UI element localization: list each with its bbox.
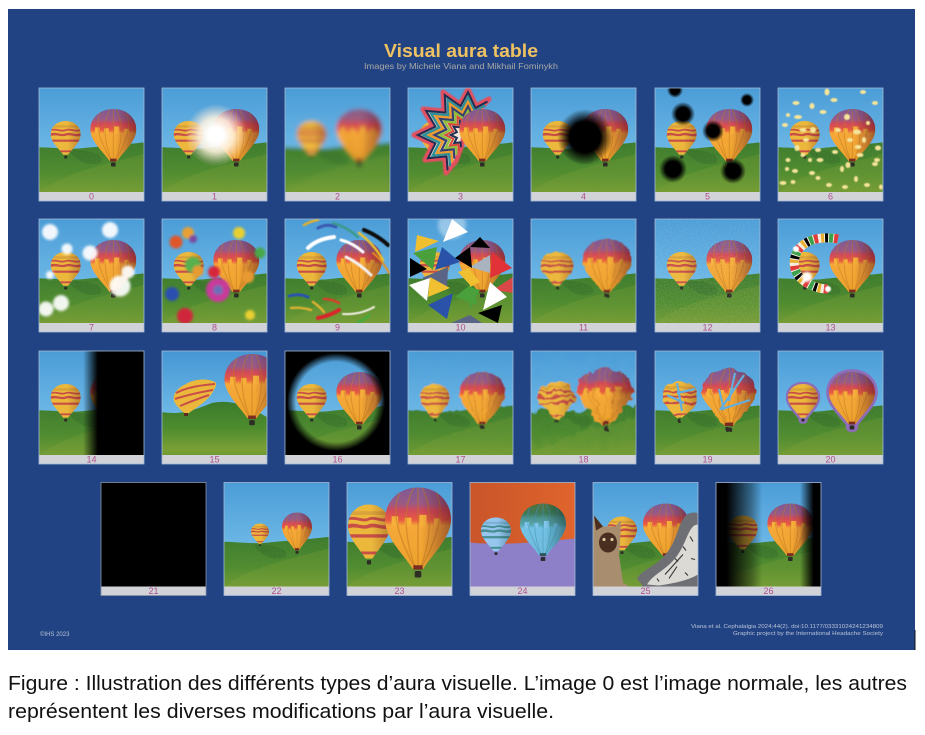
scene 6 with sparkles (778, 88, 883, 192)
number 9: 9 (335, 323, 340, 333)
number 16: 16 (332, 455, 343, 465)
number 13: 13 (825, 323, 836, 333)
black edge mark (914, 630, 916, 650)
number 5: 5 (705, 192, 710, 202)
scene 1 with white glare (162, 88, 267, 192)
panel 2: blurred vision (273, 76, 402, 204)
number 3: 3 (458, 192, 463, 202)
scene 25 balloons behind objects (593, 482, 698, 586)
number 4: 4 (581, 192, 586, 202)
scene 22 small balloons (224, 482, 329, 586)
panel 9: coloured streaks (273, 207, 402, 335)
number 15: 15 (209, 455, 220, 465)
number 0: 0 (89, 192, 94, 202)
panel 1: scintillating bright spot (150, 76, 279, 204)
scene 12 with noise (655, 219, 760, 323)
panel 17: wavy distortion (396, 339, 525, 467)
panel 11: shimmering image (519, 207, 648, 335)
scene 11 softened (531, 219, 636, 323)
melting clock (637, 512, 698, 586)
panel 16: tunnel vision (273, 339, 402, 467)
number 19: 19 (702, 455, 713, 465)
black image (101, 482, 206, 586)
scene 18 mosaic (531, 351, 636, 455)
scene 15 distorted (162, 351, 267, 455)
panel 5: multiple black spots (643, 76, 772, 204)
number 6: 6 (828, 192, 833, 202)
panel 7: white blotches (27, 207, 156, 335)
scene 0 (39, 88, 144, 192)
number 26: 26 (763, 586, 774, 596)
scene 13 with ring (778, 219, 883, 323)
panel 14: right hemianopia (27, 339, 156, 467)
number 2: 2 (335, 192, 340, 202)
scene 14 with black right side (39, 351, 144, 455)
number 10: 10 (455, 323, 466, 333)
number 8: 8 (212, 323, 217, 333)
panel 24: altered colours (470, 482, 575, 596)
panel 22: micropsia (212, 470, 341, 598)
scene 2 blurred (285, 88, 390, 192)
panel 3: zigzag fortification spectrum (396, 76, 525, 204)
copyright: ©IHS 2023 (40, 631, 70, 638)
number 12: 12 (702, 323, 713, 333)
number 1: 1 (212, 192, 217, 202)
scene 20 with halos (778, 351, 883, 455)
number 7: 7 (89, 323, 94, 333)
panel 19: fragmented balloons (643, 339, 772, 467)
scene 16 with black vignette (285, 351, 390, 455)
cat (593, 516, 629, 586)
scene 17 wavy (408, 351, 513, 455)
title: Visual aura table (384, 40, 538, 61)
caption line 1: Figure : Illustration des différents types d’aura visuelle. L’image 0 est l’image normale, les autres (8, 672, 907, 695)
scene 26 with dark sides (716, 482, 821, 586)
subtitle: Images by Michele Viana and Mikhail Fominykh (364, 61, 558, 71)
number 25: 25 (640, 586, 651, 596)
number 23: 23 (394, 586, 405, 596)
scene 7 with white spots (39, 219, 144, 323)
panel 23: macropsia (335, 470, 464, 598)
number 24: 24 (517, 586, 528, 596)
scene 4 with black spot (531, 88, 636, 192)
panel 26: bilateral peripheral loss (704, 470, 833, 598)
panel 21: total blindness, black image (101, 482, 206, 596)
panel 4: central black scotoma (519, 76, 648, 204)
panel 0: normal image (27, 76, 156, 204)
panel 25: hallucinated cat and melting clock (581, 470, 710, 598)
scene 19 fragmented (655, 351, 760, 455)
panel 15: distorted balloons and tilted horizon (162, 351, 280, 465)
number 20: 20 (825, 455, 836, 465)
scene 24 false colour (470, 482, 575, 586)
graphic credit: Graphic project by the International Headache Society (733, 631, 883, 637)
number 17: 17 (455, 455, 466, 465)
scene 5 with spots (655, 88, 760, 192)
panel 8: coloured blobs (150, 207, 279, 335)
scene 9 with streaks (285, 219, 390, 323)
scene 3 with zigzag arc (408, 88, 513, 192)
panel 13: coloured ring around small balloon (766, 207, 895, 335)
number 21: 21 (148, 586, 159, 596)
number 11: 11 (579, 323, 588, 333)
scene 8 with coloured spots (162, 219, 267, 323)
panel 12: visual snow (643, 207, 772, 335)
panel 18: mosaic distortion (519, 339, 648, 467)
number 22: 22 (271, 586, 282, 596)
panel 6: golden sparkles (766, 76, 895, 204)
caption line 2: représentent les diverses modifications par l’aura visuelle. (8, 700, 554, 723)
scene 23 large balloons (347, 482, 452, 586)
panel 20: purple halo outlines (766, 339, 895, 467)
citation: Viana et al. Cephalalgia 2024;44(2). doi:10.1177/03331024241234809 (691, 624, 883, 630)
number 18: 18 (578, 455, 589, 465)
number 14: 14 (86, 455, 97, 465)
panel 10: kaleidoscopic triangles (396, 207, 525, 335)
tilted small balloon (174, 380, 216, 416)
scene 10 with triangles (408, 219, 513, 323)
